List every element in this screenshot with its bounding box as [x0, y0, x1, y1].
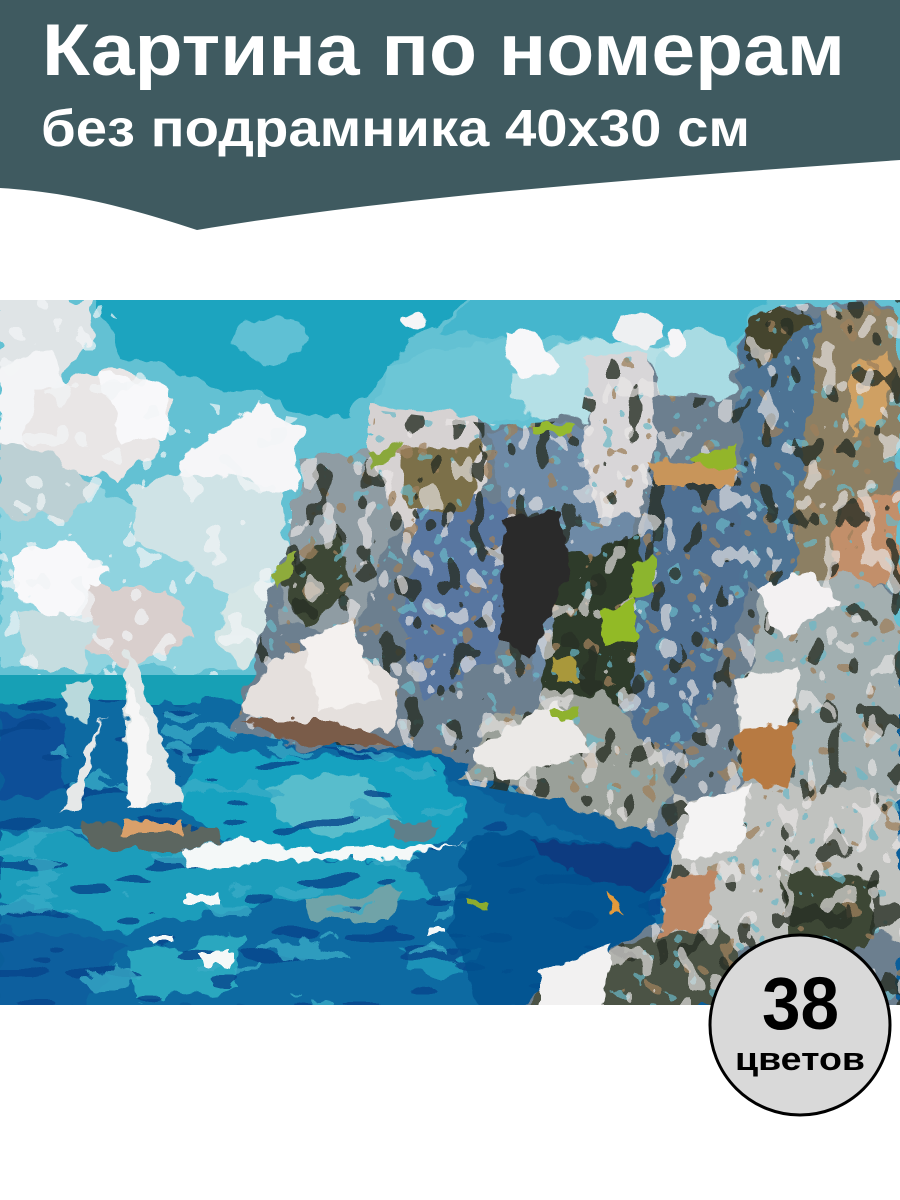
badge: 38 colours: [710, 935, 890, 1115]
painting: seaside cliffs: [0, 290, 900, 1010]
title: Картина по номерам: [42, 10, 845, 91]
sky: [0, 290, 900, 700]
header banner: [0, 0, 900, 230]
main rock mass: [235, 300, 900, 1010]
clouds: [0, 300, 687, 670]
badge label: цветов: [735, 1041, 865, 1077]
badge number: 38: [762, 962, 839, 1045]
rock mottling: [230, 300, 900, 1010]
rock highlights: [240, 423, 840, 1010]
cliffs: [235, 300, 900, 1010]
sailboat: [60, 650, 440, 850]
orange reflection marks: [465, 890, 622, 915]
sea: [0, 675, 900, 1010]
subtitle: без подрамника 40х30 см: [41, 100, 750, 158]
